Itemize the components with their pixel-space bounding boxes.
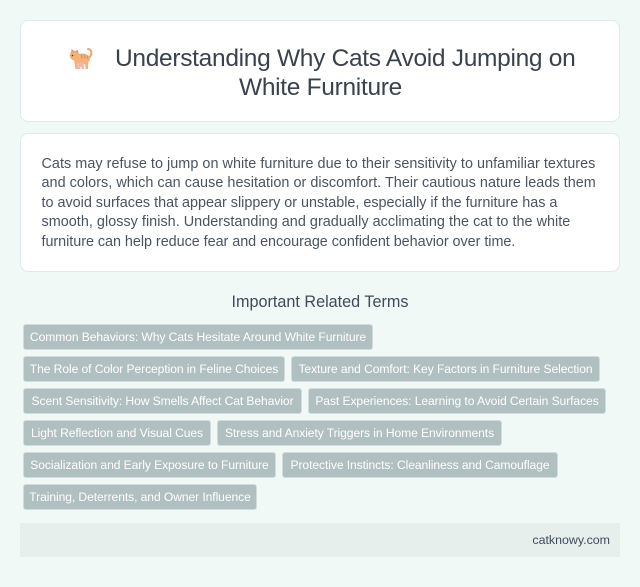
heading: related terms: Important Related Terms <box>232 293 408 311</box>
footer: source: catknowy.com <box>532 533 610 547</box>
footer: source <box>20 523 620 557</box>
tag list: Common Behaviors: Why Cats Hesitate Around White Furniture <box>30 330 366 344</box>
title <box>115 44 575 101</box>
tag list: Texture and Comfort: Key Factors in Furniture Selection <box>298 362 593 376</box>
title: White Furniture <box>239 74 402 101</box>
text block: summary paragraph: furniture can help reduce fear and encourage confident behavior over time. <box>42 234 515 250</box>
tag list: The Role of Color Perception in Feline Choices <box>30 362 278 376</box>
text block: summary paragraph: and colors, which can cause hesitation or discomfort. Their cautious nature leads them <box>42 175 596 191</box>
text block: summary paragraph <box>42 156 596 250</box>
tag list: Protective Instincts: Cleanliness and Camouflage <box>290 458 550 472</box>
text block: summary paragraph: to avoid surfaces that appear slippery or unstable, especially if the furniture has a <box>42 194 557 210</box>
tag list <box>23 324 606 510</box>
tag list: Socialization and Early Exposure to Furniture <box>30 458 269 472</box>
icon: cat <box>70 48 92 69</box>
tag list: Scent Sensitivity: How Smells Affect Cat Behavior <box>31 394 294 408</box>
panel: title card <box>20 20 620 122</box>
title: Understanding Why Cats Avoid Jumping on <box>115 44 575 72</box>
text block: summary paragraph: Cats may refuse to jump on white furniture due to their sensitivity to unfamiliar textures <box>42 156 595 172</box>
tag list: Light Reflection and Visual Cues <box>31 426 203 440</box>
tag list: Past Experiences: Learning to Avoid Certain Surfaces <box>315 394 599 408</box>
text block: summary paragraph: smooth, glossy finish. Understanding and gradually acclimating the cat to the white <box>42 214 570 230</box>
tag list: Stress and Anxiety Triggers in Home Environments <box>225 426 494 440</box>
panel: summary card <box>20 133 620 272</box>
tag list: Training, Deterrents, and Owner Influence <box>29 490 251 504</box>
